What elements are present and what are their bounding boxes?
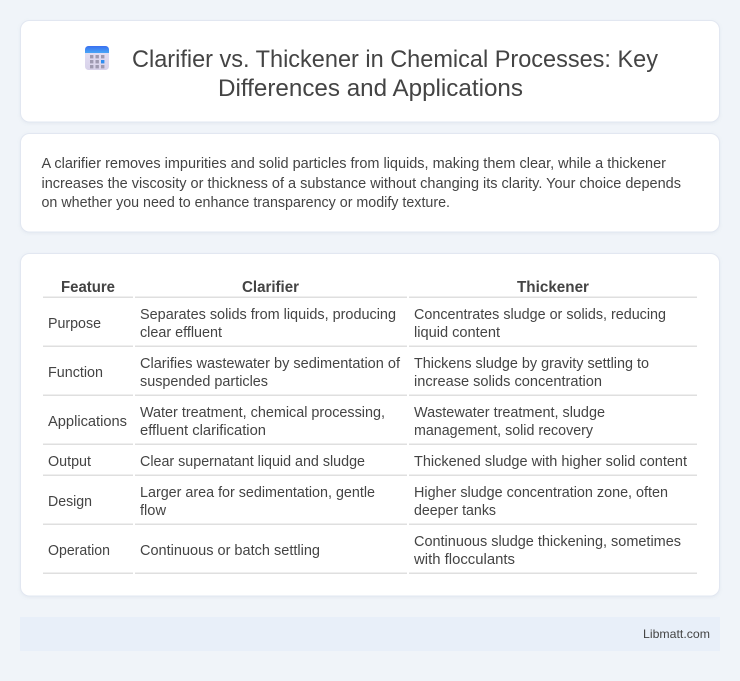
- row: design: [48, 485, 668, 519]
- row: design: Larger area for sedimentation, gentle: [140, 485, 375, 501]
- row: output: Output: [48, 454, 91, 470]
- intro paragraph: [42, 156, 681, 211]
- row: purpose: liquid content: [414, 325, 500, 341]
- panel: intro text: [20, 134, 720, 232]
- table header row: [61, 279, 589, 296]
- intro paragraph: increases the viscosity or thickness of a substance without changing its clarity. Your choice depends: [42, 176, 681, 192]
- row: purpose: Purpose: [48, 316, 101, 332]
- panel: comparison table: [20, 254, 720, 596]
- intro paragraph: A clarifier removes impurities and solid particles from liquids, making them clear, while a thickener: [42, 156, 666, 172]
- intro paragraph: on whether you need to enhance transparency or modify texture.: [42, 195, 450, 211]
- row: function: increase solids concentration: [414, 374, 602, 390]
- row: applications: Water treatment, chemical processing,: [140, 405, 385, 421]
- row: output: Clear supernatant liquid and sludge: [140, 454, 365, 470]
- footer: Libmatt.com: [643, 627, 710, 641]
- row: purpose: [48, 307, 666, 341]
- panel: header: [20, 20, 720, 122]
- row: function: Clarifies wastewater by sedimentation of: [140, 356, 401, 372]
- row: design: Higher sludge concentration zone, often: [414, 485, 668, 501]
- row: purpose: Concentrates sludge or solids, reducing: [414, 307, 666, 323]
- icon: calendar grid: [85, 46, 109, 70]
- title: Differences and Applications: [218, 75, 523, 102]
- row: operation: [48, 534, 681, 568]
- row: function: [48, 356, 649, 390]
- row: applications: effluent clarification: [140, 423, 266, 439]
- row: function: Function: [48, 365, 103, 381]
- table header row: Thickener: [517, 279, 589, 296]
- row: applications: management, solid recovery: [414, 423, 594, 439]
- row: function: suspended particles: [140, 374, 268, 390]
- row: operation: Continuous sludge thickening, sometimes: [414, 534, 681, 550]
- title: [132, 46, 658, 102]
- table header row: Feature: [61, 279, 115, 296]
- row: purpose: clear effluent: [140, 325, 222, 341]
- table header row: Clarifier: [242, 279, 299, 296]
- row: design: flow: [140, 503, 167, 519]
- row: operation: Continuous or batch settling: [140, 543, 320, 559]
- row: design: deeper tanks: [414, 503, 496, 519]
- row: applications: Wastewater treatment, sludge: [414, 405, 605, 421]
- footer: [20, 617, 720, 651]
- row: design: Design: [48, 494, 92, 510]
- row: operation: with flocculants: [413, 552, 515, 568]
- row: purpose: Separates solids from liquids, producing: [140, 307, 396, 323]
- row: applications: Applications: [48, 414, 127, 430]
- row: applications: [48, 405, 605, 439]
- row: output: [48, 454, 687, 470]
- row: output: Thickened sludge with higher solid content: [414, 454, 687, 470]
- row: function: Thickens sludge by gravity settling to: [414, 356, 649, 372]
- title: Clarifier vs. Thickener in Chemical Processes: Key: [132, 46, 658, 73]
- row: operation: Operation: [48, 543, 110, 559]
